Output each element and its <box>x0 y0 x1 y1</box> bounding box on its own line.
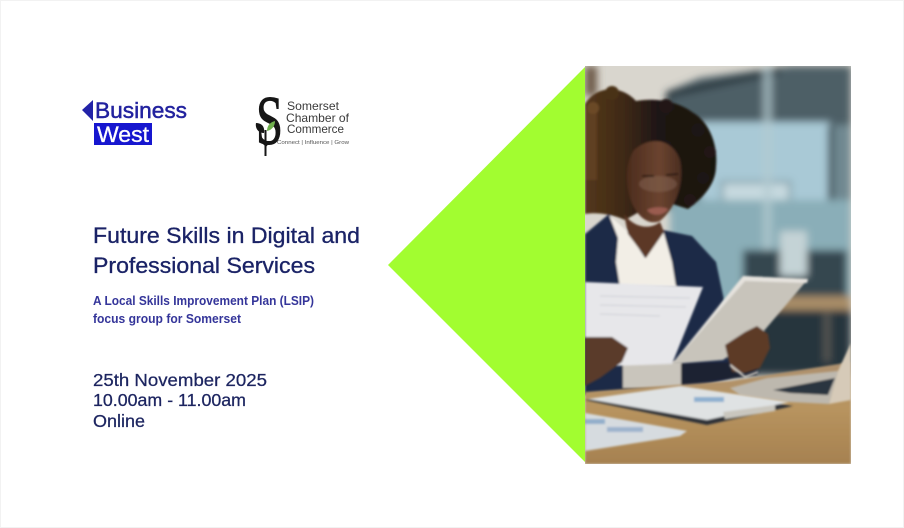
logo: Somerset Chamber of Commerce <box>256 83 350 160</box>
laptop <box>730 343 851 404</box>
title <box>93 223 360 278</box>
desk <box>585 362 851 464</box>
logo name: Somerset <box>287 99 340 113</box>
title: Professional Services <box>93 253 315 278</box>
green triangle <box>388 67 585 462</box>
subtitle <box>93 294 314 326</box>
logo arrow <box>82 100 93 121</box>
logo name: Chamber of <box>286 111 350 125</box>
logo wordmark: West: West <box>97 122 149 147</box>
hands and papers <box>585 276 808 386</box>
event details: date, time, location: 10.00am - 11.00am <box>93 390 246 410</box>
hair <box>585 86 716 220</box>
subtitle: A Local Skills Improvement Plan (LSIP) <box>93 294 314 308</box>
event details: date, time, location: 25th November 2025 <box>93 370 267 390</box>
loose paper on desk <box>585 413 687 451</box>
event details: date, time, location <box>93 370 267 431</box>
jacket <box>585 214 760 395</box>
event details: date, time, location: Online <box>93 411 145 431</box>
face and neck <box>624 141 681 258</box>
logo tagline: Connect | Influence | Grow <box>277 140 349 146</box>
cuff and sleeve <box>623 362 681 388</box>
logo wordmark: Business: Business <box>95 98 187 123</box>
logo name <box>286 99 350 136</box>
logo name: Commerce <box>287 122 344 136</box>
title: Future Skills in Digital and <box>93 223 360 248</box>
subtitle: focus group for Somerset <box>93 312 242 326</box>
clipboard <box>585 386 793 425</box>
photo: woman with tablet and papers at a desk <box>585 66 851 464</box>
logo emblem: S <box>256 83 283 160</box>
logo: Business West <box>82 98 187 147</box>
shirt <box>609 215 676 287</box>
